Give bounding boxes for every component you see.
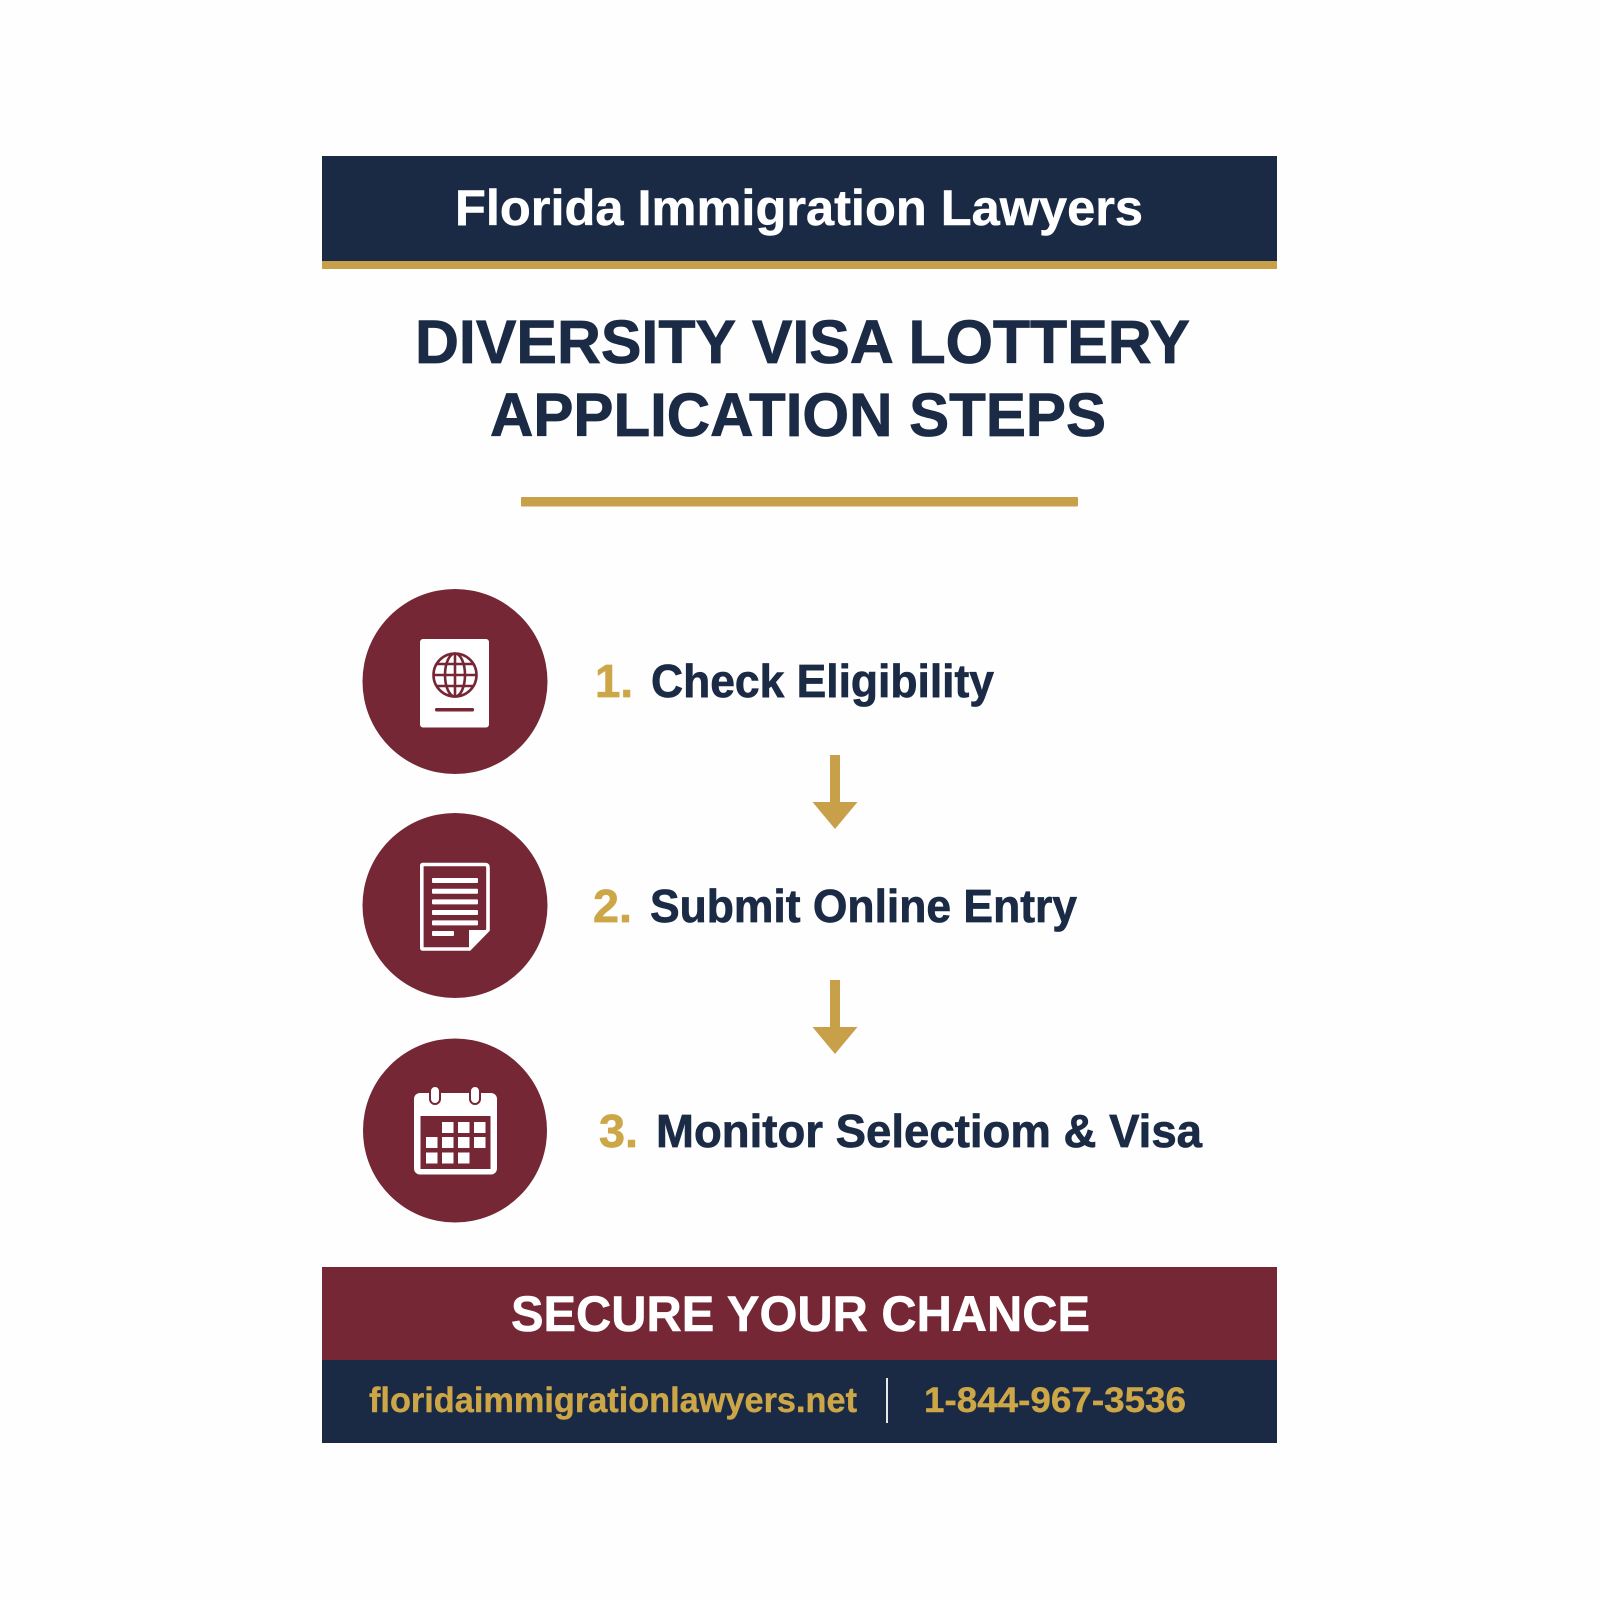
- call to action text: SECURE YOUR CHANCE: [511, 1286, 1090, 1342]
- call to action banner: [322, 1267, 1277, 1360]
- step 2 label: 2.: [593, 880, 632, 932]
- header firm name: Florida Immigration Lawyers: [455, 180, 1143, 236]
- title underline: [521, 497, 1078, 506]
- step 2 icon: document: [362, 813, 548, 998]
- header banner: [322, 156, 1277, 269]
- step 1 label: Check Eligibility: [651, 655, 994, 707]
- arrow 1 to 2: [812, 755, 858, 829]
- step 3 icon: calendar: [363, 1038, 547, 1222]
- phone number: 1-844-967-3536: [924, 1381, 1186, 1420]
- title: [415, 308, 1190, 449]
- website: floridaimmigrationlawyers.net: [369, 1381, 857, 1420]
- contact bar: [322, 1360, 1277, 1443]
- title: APPLICATION STEPS: [490, 381, 1106, 449]
- step 1 icon: passport: [362, 589, 548, 774]
- step 1 label: 1.: [595, 655, 633, 707]
- step 2 label: Submit Online Entry: [650, 880, 1077, 932]
- step 3 label: 3.: [599, 1105, 638, 1157]
- arrow 2 to 3: [812, 980, 858, 1054]
- step 3 label: Monitor Selectiom & Visa: [656, 1105, 1202, 1157]
- title: DIVERSITY VISA LOTTERY: [415, 308, 1190, 376]
